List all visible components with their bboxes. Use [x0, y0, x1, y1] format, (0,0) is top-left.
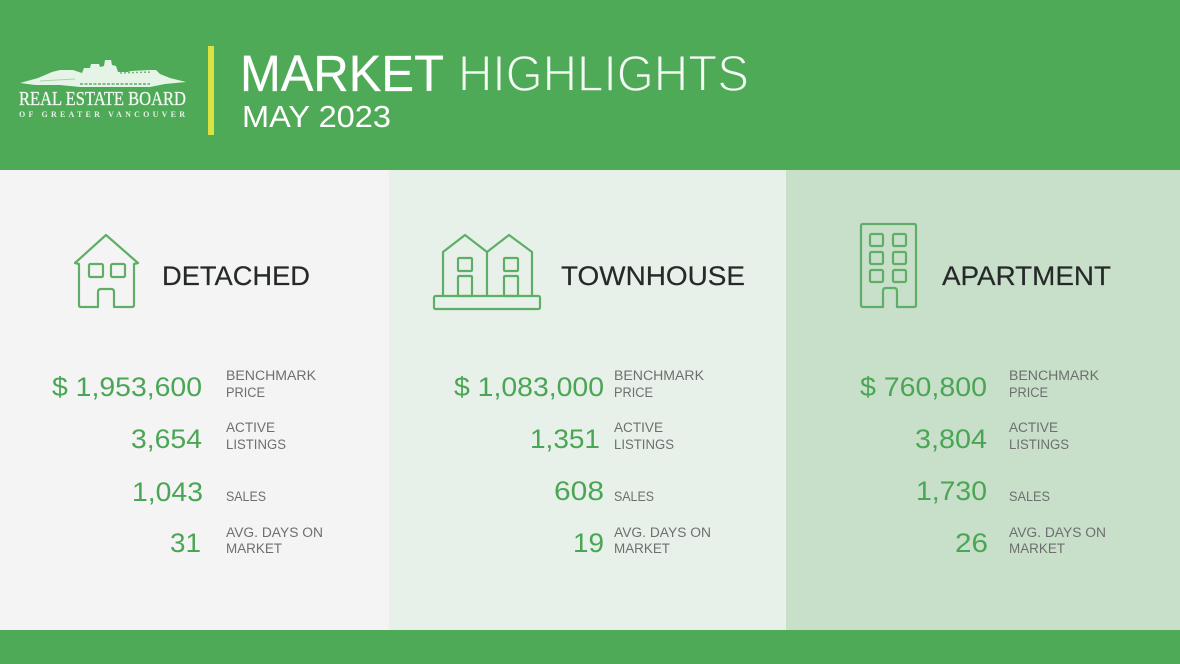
stat: active listings: 3,804: [915, 424, 987, 454]
logo skyline: [20, 60, 186, 87]
stat: active listings: LISTINGS: [226, 437, 286, 452]
logo subtitle: OF GREATER VANCOUVER: [19, 110, 185, 119]
stat: sales: 608: [554, 476, 604, 506]
stat: benchmark price: BENCHMARK: [1009, 368, 1099, 383]
icon: townhouse: [434, 235, 540, 309]
stat: active listings: [530, 420, 674, 454]
stat: sales: SALES: [1009, 489, 1050, 504]
stat: sales: [554, 476, 654, 506]
stat: sales: [916, 476, 1050, 506]
stat: benchmark price: $ 760,800: [860, 372, 987, 402]
stat: days on market: [955, 525, 1106, 558]
date: MAY 2023: [242, 100, 391, 134]
stat: active listings: LISTINGS: [1009, 437, 1069, 452]
stat: days on market: AVG. DAYS ON: [614, 525, 711, 540]
stat: active listings: LISTINGS: [614, 437, 674, 452]
stat: benchmark price: [52, 368, 316, 402]
stat: days on market: 19: [573, 528, 604, 558]
stat: days on market: MARKET: [226, 541, 282, 556]
stat: days on market: [170, 525, 323, 558]
stat: days on market: AVG. DAYS ON: [226, 525, 323, 540]
stat: active listings: 1,351: [530, 424, 600, 454]
heading: apartment: APARTMENT: [942, 261, 1111, 291]
logo: Real Estate Board of Greater Vancouver: [19, 60, 186, 119]
icon: house: [75, 235, 138, 307]
stat: days on market: 26: [955, 528, 988, 558]
stat: benchmark price: PRICE: [614, 385, 653, 400]
stat: days on market: 31: [170, 528, 201, 558]
panel: detached: [0, 170, 389, 630]
panel: apartment: [786, 170, 1180, 630]
stat: sales: [132, 477, 266, 507]
stat: days on market: MARKET: [614, 541, 670, 556]
stat: benchmark price: PRICE: [226, 385, 265, 400]
header band: [0, 0, 1180, 170]
stat: active listings: ACTIVE: [226, 420, 275, 435]
stat: active listings: 3,654: [131, 424, 202, 454]
stat: sales: 1,043: [132, 477, 203, 507]
stat: active listings: ACTIVE: [614, 420, 663, 435]
stat: days on market: [573, 525, 711, 558]
heading: townhouse: TOWNHOUSE: [561, 261, 745, 291]
yellow divider: [208, 46, 214, 135]
footer band: [0, 630, 1180, 664]
stat: benchmark price: $ 1,083,000: [454, 372, 604, 402]
stat: sales: 1,730: [916, 476, 987, 506]
stat: days on market: MARKET: [1009, 541, 1065, 556]
title light word: HIGHLIGHTS: [458, 45, 749, 102]
stat: active listings: ACTIVE: [1009, 420, 1058, 435]
stat: benchmark price: BENCHMARK: [226, 368, 316, 383]
stat: active listings: [915, 420, 1069, 454]
logo name: REAL ESTATE BOARD: [19, 88, 186, 110]
icon: apartment: [861, 224, 916, 307]
stat: days on market: AVG. DAYS ON: [1009, 525, 1106, 540]
stat: benchmark price: $ 1,953,600: [52, 372, 202, 402]
stat: benchmark price: BENCHMARK: [614, 368, 704, 383]
stat: benchmark price: [454, 368, 704, 402]
stat: active listings: [131, 420, 286, 454]
stat: benchmark price: PRICE: [1009, 385, 1048, 400]
stat: sales: SALES: [614, 489, 654, 504]
stat: sales: SALES: [226, 489, 266, 504]
panel: townhouse: [389, 170, 786, 630]
stat: benchmark price: [860, 368, 1099, 402]
heading: detached: DETACHED: [162, 261, 310, 291]
title: MARKET: [240, 45, 444, 102]
